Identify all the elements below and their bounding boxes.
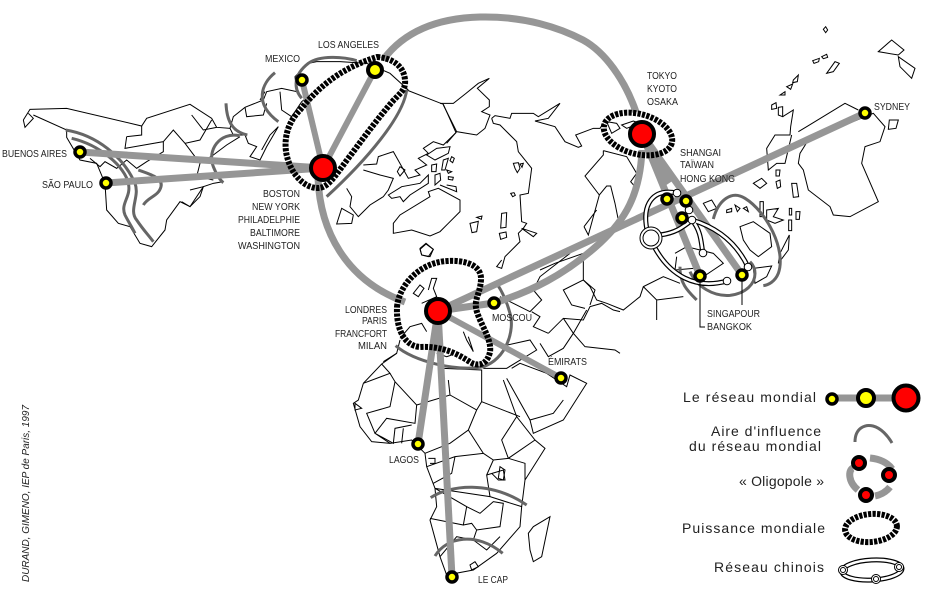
legend labels: Le réseau mondial [683,389,816,405]
influence arcs: Europe and Africa [396,283,527,556]
city labels: TAÏWAN [680,159,714,171]
link: New York to Los Angeles, Mexico, Buenos Aires and São Paulo [80,70,375,183]
link arcs: New York, Tokyo, Europe, Moscow [318,17,642,303]
city labels: LE CAP [478,575,508,586]
réseau chinois [640,189,752,285]
legend: réseau chinois [838,558,904,584]
legend: oligopole [850,457,895,501]
city labels: KYOTO [647,84,677,95]
network inner line [646,192,748,284]
map: Americas [23,62,408,247]
legend labels: « Oligopole » [739,473,824,489]
credit: DURAND, GIMENO, IEP de Paris, 1997 [21,405,32,582]
map: South-East Asia and Oceania [583,27,915,320]
network small nodes [673,189,752,285]
city labels: HONG KONG [680,174,735,185]
legend labels: Aire d'influence [711,423,821,439]
city labels: BALTIMORE [250,228,300,239]
network casing [646,192,748,284]
city labels: LOS ANGELES [318,40,379,51]
links: Tokyo to South-East Asia [642,134,742,276]
city labels: MILAN [358,341,387,352]
city labels: BANGKOK [707,322,752,333]
legend: aire d'influence [855,426,892,443]
map: North Atlantic and Russia [337,90,460,257]
aires d'influence [66,57,780,556]
city labels: NEW YORK [252,202,300,213]
influence arcs: Americas [66,57,407,242]
map: Asia [440,78,640,270]
city labels: SINGAPOUR [707,309,760,320]
puissance mondiale: Japon [599,106,677,162]
city labels: LAGOS [389,455,419,466]
network hub ring [640,227,662,249]
large yellow node: Los Angeles [368,63,382,77]
map: Africa and Middle East [353,243,620,575]
city labels: MEXICO [265,54,300,65]
city labels: FRANCFORT [335,329,387,340]
city labels: SHANGAI [680,148,721,159]
city labels: WASHINGTON [238,241,300,252]
city labels: SYDNEY [874,102,910,113]
city labels: LONDRES [345,305,387,316]
legend: réseau mondial [827,386,918,410]
legend labels [682,389,825,575]
city labels: PHILADELPHIE [238,215,300,226]
network links [80,17,865,577]
legend: puissance mondiale [844,512,898,544]
legend [682,386,918,584]
city labels: PARIS [362,316,387,327]
puissance mondiale: Europe [397,261,490,365]
legend labels: du réseau mondial [689,438,821,454]
leader lines: Singapour and Bangkok [700,280,742,327]
puissance mondiale: Amérique du Nord [286,57,405,188]
city labels: BOSTON [263,189,300,200]
legend labels: Réseau chinois [714,559,824,575]
city labels: SÃO PAULO [42,178,93,191]
city labels: ÉMIRATS [548,355,587,368]
yellow nodes [75,75,870,582]
red hubs [311,122,654,323]
influence arcs: South-East Asia [680,195,780,300]
city labels: OSAKA [647,97,678,108]
city labels: MOSCOU [492,313,532,324]
legend labels: Puissance mondiale [682,520,825,536]
city labels: TOKYO [647,71,677,82]
city labels: BUENOS AIRES [2,149,67,160]
links: Europe hub [418,113,865,577]
